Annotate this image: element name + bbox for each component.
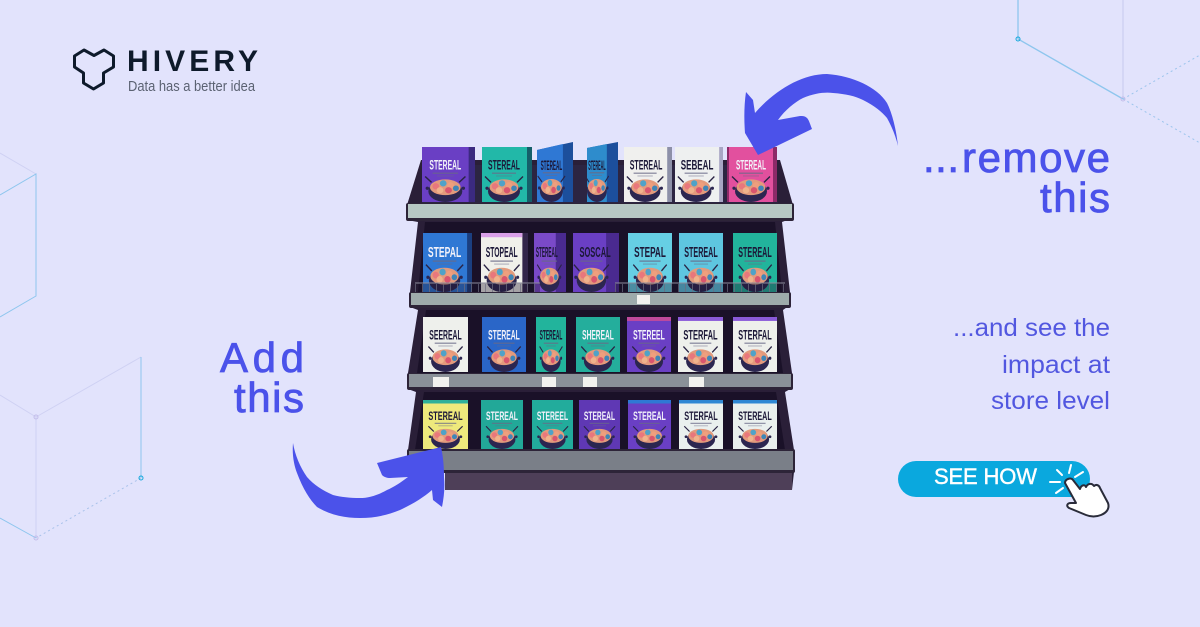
shelf silhouette [407, 160, 794, 490]
box: blue angled 2 [587, 142, 618, 202]
row 2 boxes [423, 233, 777, 292]
box: purple 2 [628, 400, 671, 449]
wordmark: HIVERY [127, 45, 258, 78]
heading: remove this: remove [962, 134, 1110, 181]
button: see how: SEE HOW [934, 464, 1037, 489]
box: blue [482, 317, 526, 372]
box: white [624, 147, 672, 202]
row 4 boxes [423, 400, 777, 449]
box: white pink top [481, 233, 528, 292]
box: white [423, 317, 468, 372]
heading: add this: this [234, 374, 304, 421]
text: and see the impact at store level: ...and see the [953, 314, 1110, 342]
box: white purple top [678, 317, 723, 372]
background: top right cube lines [1016, 0, 1200, 143]
box: blue [423, 233, 472, 292]
box: teal [733, 233, 777, 292]
heading: remove this: this [1040, 174, 1110, 221]
box: purple narrow [534, 233, 566, 292]
arrow: add this [293, 443, 444, 518]
box: light blue 2 [679, 233, 723, 292]
row 3 boxes [423, 317, 777, 372]
tagline: Data has a better idea [128, 79, 256, 95]
box: pink [727, 147, 777, 202]
shelf edges [406, 203, 795, 473]
logo: HIVERY [74, 45, 258, 95]
icon: hexagon trefoil [74, 50, 114, 89]
back panels [422, 165, 778, 203]
row 1 boxes [422, 142, 777, 202]
box: teal 2 [532, 400, 573, 449]
price tags [433, 295, 704, 387]
box: teal [576, 317, 620, 372]
arrow: remove this [744, 74, 898, 155]
text: and see the impact at store level [953, 314, 1110, 415]
button: see how [898, 461, 1109, 516]
icon: pointing hand [1065, 479, 1109, 516]
box: teal [481, 400, 523, 449]
icon: click sparks [1050, 465, 1083, 493]
box: teal [482, 147, 532, 202]
heading: remove this [923, 134, 1110, 221]
text: and see the impact at store level: store level [991, 387, 1110, 415]
box: yellow [423, 400, 468, 449]
price rails [415, 283, 785, 292]
box: white 2 [675, 147, 723, 202]
box: white purple top 2 [733, 317, 777, 372]
heading: add this: Add [220, 334, 304, 381]
box: purple [422, 147, 475, 202]
box: teal narrow [536, 317, 566, 372]
shelf unit [406, 142, 795, 490]
box: white blue top [679, 400, 723, 449]
box: purple [579, 400, 620, 449]
text: and see the impact at store level: impact at [1002, 351, 1110, 379]
heading: remove this: ... [923, 134, 959, 181]
heading: add this [220, 334, 304, 421]
base plinth [445, 472, 792, 490]
box: light blue [628, 233, 672, 292]
box: blue angled [537, 142, 573, 202]
box: white blue top 2 [733, 400, 777, 449]
box: purple [627, 317, 671, 372]
background: lower left cube lines [0, 153, 143, 540]
box: purple [573, 233, 619, 292]
